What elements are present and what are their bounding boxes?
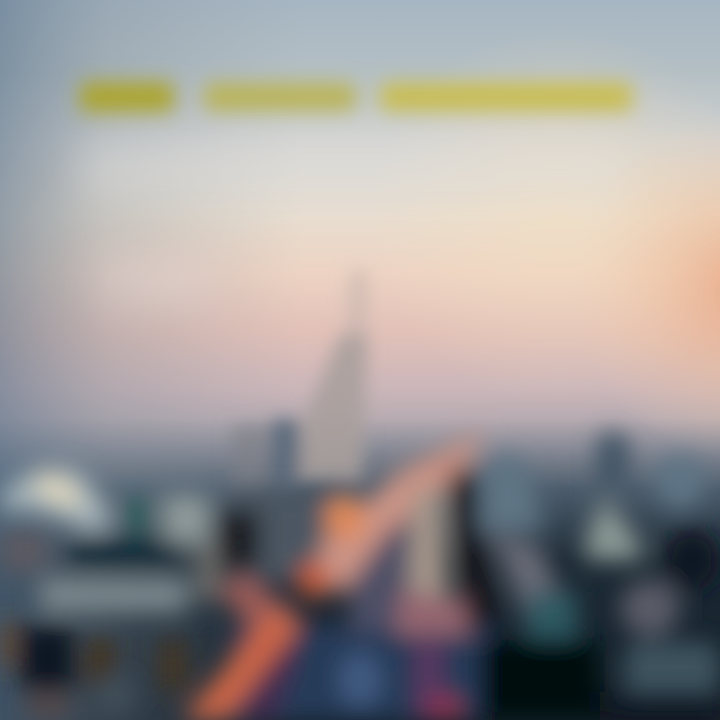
illustration: left district buildings [0,495,218,720]
illustration: dark gap beside road [218,470,500,630]
title: illegible yellow headline, three blurred words [80,82,632,112]
icon: white dome building [0,466,114,532]
illustration: lower central street [240,650,382,720]
illustration: right district buildings [478,430,720,720]
illustration: pale vertical street [395,490,472,720]
illustration: glowing main road [182,430,485,720]
text block: faint pale subtitle area [80,140,620,305]
illustration: central street base [230,490,494,720]
illustration: city buildings and roads [0,430,720,720]
illustration: central spire tower [232,270,368,495]
